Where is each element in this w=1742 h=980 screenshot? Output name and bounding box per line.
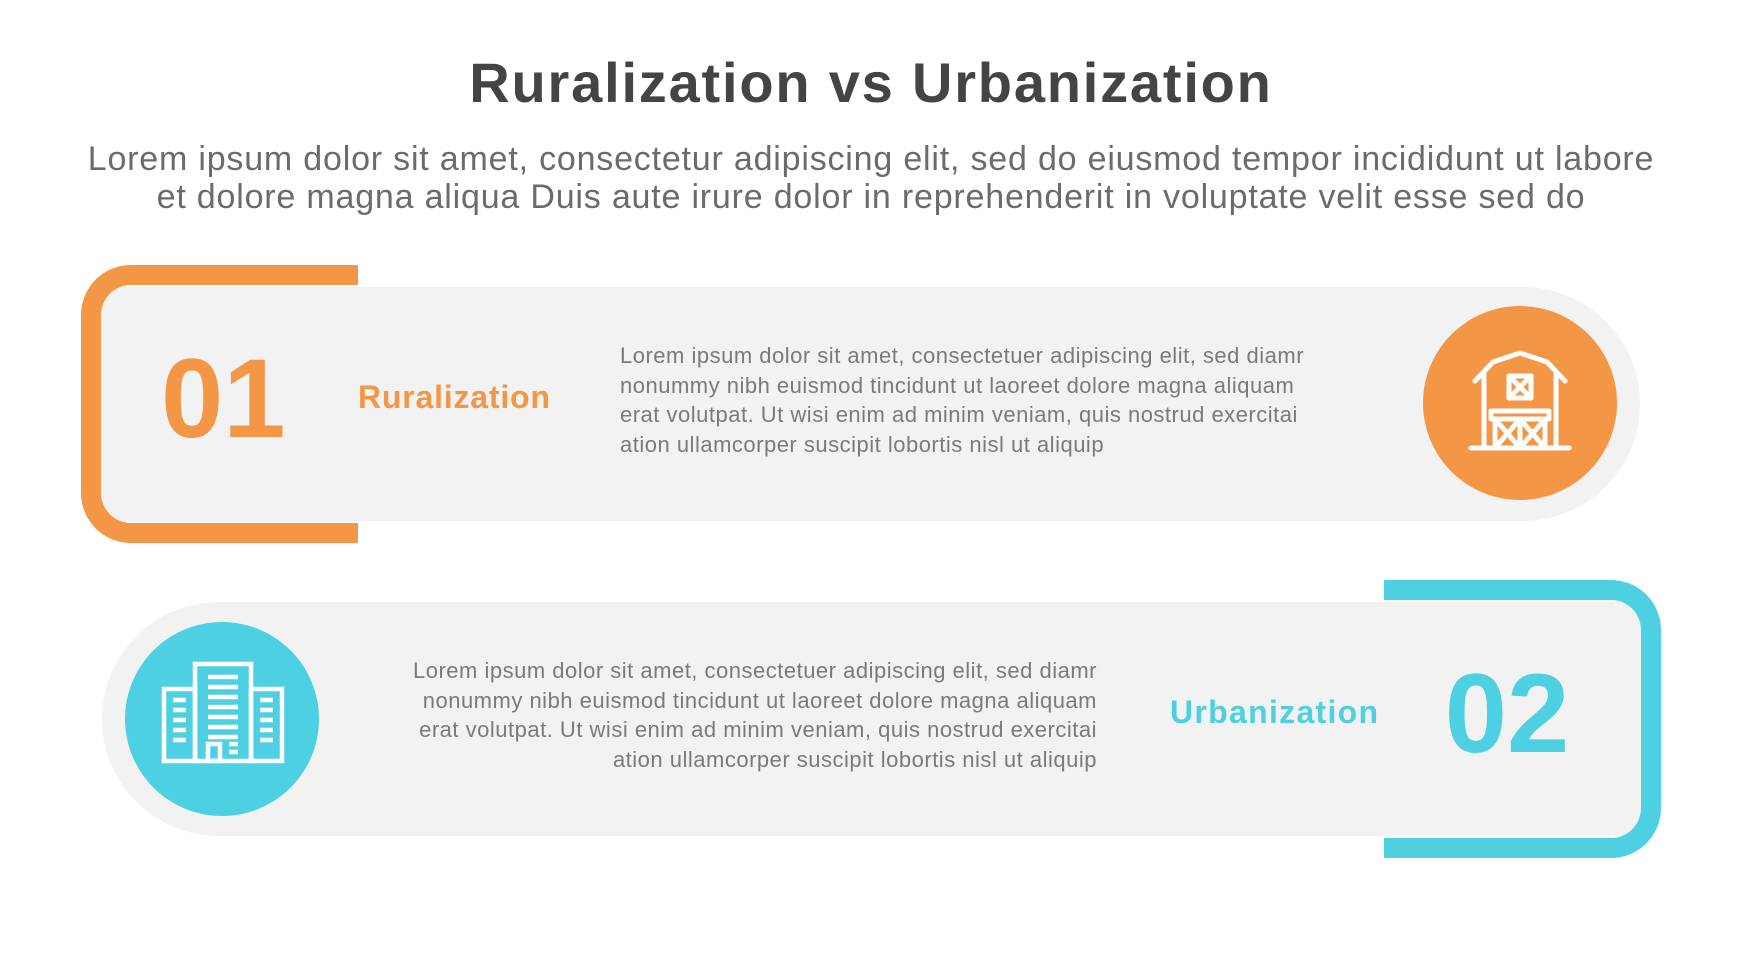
panel background — [102, 602, 1642, 836]
number 01: 01 — [161, 336, 286, 461]
cyan bracket — [1384, 580, 1661, 858]
panel: urbanization — [102, 580, 1661, 858]
orange bracket — [81, 265, 358, 543]
description text — [620, 343, 1304, 456]
label urbanization: Urbanization — [1170, 694, 1379, 730]
description text: Lorem ipsum dolor sit amet, consectetuer adipiscing elit, sed diamr — [413, 658, 1097, 683]
title: Ruralization vs Urbanization — [469, 51, 1273, 114]
panel: ruralization — [81, 265, 1640, 543]
description text: ation ullamcorper suscipit lobortis nisl ut aliquip — [620, 432, 1104, 456]
description text: nonummy nibh euismod tincidunt ut laoreet dolore magna aliquam — [620, 372, 1294, 398]
number 02: 02 — [1445, 651, 1569, 776]
description text: ation ullamcorper suscipit lobortis nisl ut aliquip — [613, 746, 1097, 772]
subtitle — [88, 140, 1654, 216]
description text: erat volutpat. Ut wisi enim ad minim veniam, quis nostrud exercitai — [419, 717, 1097, 742]
description text: nonummy nibh euismod tincidunt ut laoreet dolore magna aliquam — [423, 688, 1097, 712]
description text: erat volutpat. Ut wisi enim ad minim veniam, quis nostrud exercitai — [620, 402, 1298, 427]
icon: buildings — [125, 622, 319, 816]
subtitle: Lorem ipsum dolor sit amet, consectetur adipiscing elit, sed do eiusmod tempor incididunt ut labore — [88, 140, 1654, 178]
subtitle: et dolore magna aliqua Duis aute irure dolor in reprehenderit in voluptate velit esse sed do — [157, 178, 1585, 216]
icon: barn — [1423, 306, 1617, 500]
panel background — [100, 287, 1640, 521]
label ruralization: Ruralization — [358, 379, 551, 415]
description text — [413, 658, 1097, 772]
description text: Lorem ipsum dolor sit amet, consectetuer adipiscing elit, sed diamr — [620, 343, 1304, 368]
